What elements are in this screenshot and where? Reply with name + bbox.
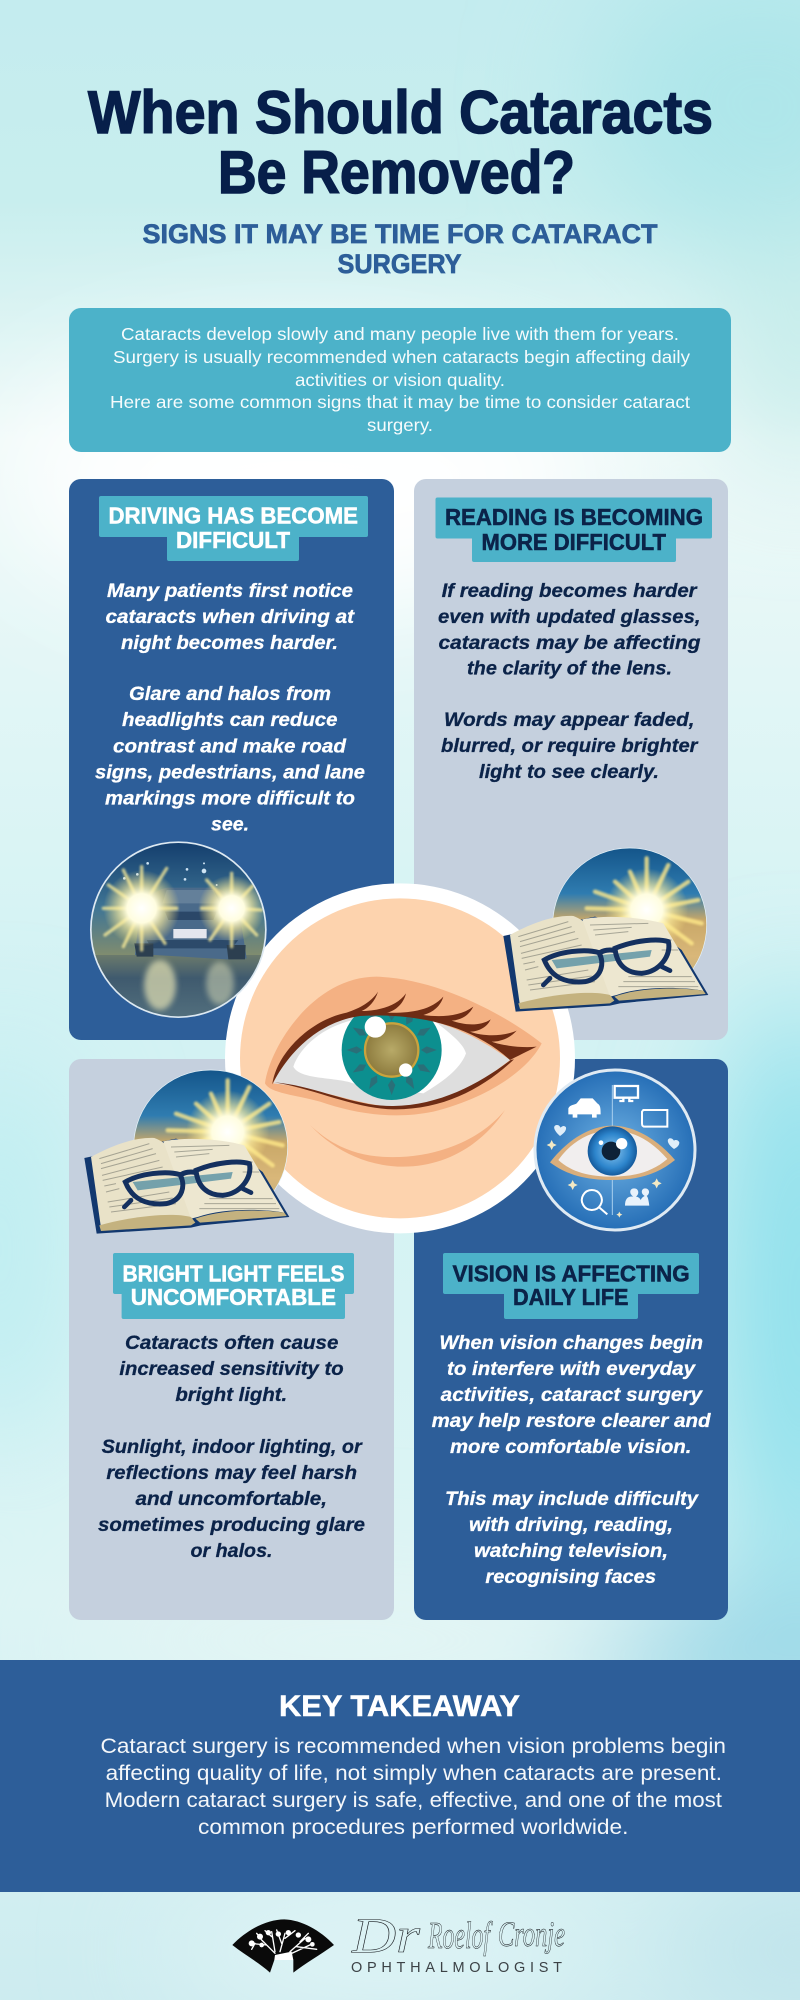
text: driving body: cataracts when driving at: [106, 606, 356, 628]
image: eye with daily life icons: [535, 1070, 695, 1230]
text: driving body: Many patients first notice: [107, 580, 353, 602]
eyelid: [265, 977, 542, 1115]
icon: people: [625, 1188, 649, 1206]
signature: Cronje: [498, 1914, 565, 1954]
text: reading body: blurred, or require brighter: [441, 735, 699, 757]
text: bright light body: Cataracts often cause: [125, 1332, 339, 1354]
text: bright light body: or halos.: [190, 1540, 272, 1562]
text: driving body: contrast and make road: [113, 736, 347, 758]
text: reading body: the clarity of the lens.: [467, 658, 672, 680]
text: key takeaway body: Modern cataract surgery is safe, effective, and one of the most: [105, 1789, 722, 1812]
signature: Roelof: [427, 1915, 493, 1957]
text: daily life body: with driving, reading,: [469, 1514, 673, 1536]
title: [88, 79, 713, 206]
subtitle: SIGNS IT MAY BE TIME FOR CATARACT: [142, 219, 658, 249]
main eye: [550, 1126, 675, 1180]
text: daily life body: When vision changes begin: [439, 1332, 703, 1354]
text: driving body: signs, pedestrians, and lane: [95, 762, 365, 784]
heading: daily life: DAILY LIFE: [513, 1284, 628, 1310]
text: bright light body: [98, 1332, 365, 1562]
text: daily life body: This may include difficulty: [445, 1488, 699, 1510]
panel: daily life: [414, 1059, 728, 1620]
panel: intro: Here are some common signs that it may be time to consider cataract: [110, 392, 690, 412]
iris: [342, 1016, 442, 1100]
image: car headlights: [85, 840, 272, 1022]
text: reading body: If reading becomes harder: [442, 580, 698, 602]
text: key takeaway body: common procedures performed worldwide.: [198, 1816, 628, 1839]
text: reading body: Words may appear faded,: [444, 709, 694, 731]
text: driving body: [95, 580, 365, 836]
image: book and sun, bright light panel: [84, 1069, 289, 1234]
heading: bright light: [113, 1253, 354, 1319]
signature: [351, 1907, 565, 1963]
band: key takeaway: [0, 1660, 800, 1892]
heading: reading: MORE DIFFICULT: [482, 529, 667, 555]
center eye illustration: [225, 883, 575, 1233]
heading: daily life: [443, 1253, 699, 1319]
eyeball: [273, 1013, 510, 1107]
heading: bright light: UNCOMFORTABLE: [131, 1284, 336, 1310]
panel: reading: [414, 479, 728, 1040]
heading: driving: [99, 496, 368, 561]
title: When Should Cataracts: [88, 79, 713, 146]
image: book and sun, reading panel: [503, 847, 708, 1012]
text: key takeaway body: Cataract surgery is recommended when vision problems begin: [100, 1735, 726, 1758]
text: bright light body: reflections may feel harsh: [106, 1462, 357, 1484]
text: daily life body: more comfortable vision.: [450, 1436, 691, 1458]
panel: intro: [69, 308, 731, 452]
text: bright light body: Sunlight, indoor lighting, or: [102, 1436, 363, 1458]
logo: [232, 1907, 565, 1976]
under-eye crease: [310, 1110, 505, 1167]
text: bright light body: increased sensitivity to: [119, 1358, 344, 1380]
text: driving body: headlights can reduce: [122, 709, 338, 731]
text: key takeaway body: [100, 1735, 726, 1839]
icon: monitor: [615, 1086, 638, 1101]
text: driving body: markings more difficult to: [105, 788, 355, 810]
wordmark: OPHTHALMOLOGIST: [351, 1960, 562, 1976]
icon: heart right: [668, 1138, 679, 1149]
panel: intro: Cataracts develop slowly and many people live with them for years.: [121, 324, 679, 344]
panel: intro: Surgery is usually recommended when cataracts begin affecting daily: [113, 347, 690, 367]
text: daily life body: to interfere with everyday: [447, 1358, 696, 1380]
panel: driving: [69, 479, 394, 1040]
icon: car: [568, 1098, 601, 1118]
text: daily life body: recognising faces: [485, 1566, 656, 1588]
text: driving body: Glare and halos from: [129, 683, 331, 705]
text: daily life body: may help restore clearer and: [432, 1410, 712, 1432]
text: daily life body: [432, 1332, 712, 1588]
panel: intro: surgery.: [367, 415, 433, 435]
heading: driving: DIFFICULT: [176, 527, 291, 553]
sparkles: [547, 1140, 662, 1218]
text: driving body: see.: [211, 814, 249, 836]
text: bright light body: bright light.: [175, 1384, 287, 1406]
eyeliner and lashes: [272, 992, 537, 1109]
subtitle: [142, 219, 658, 279]
text: bright light body: and uncomfortable,: [136, 1488, 327, 1510]
icon: magnifier: [582, 1190, 607, 1214]
text: bright light body: sometimes producing glare: [98, 1514, 365, 1536]
text: daily life body: watching television,: [474, 1540, 668, 1562]
heading: driving: DRIVING HAS BECOME: [108, 502, 358, 528]
text: reading body: light to see clearly.: [479, 761, 659, 783]
icon: heart left: [554, 1125, 566, 1136]
heading: daily life: VISION IS AFFECTING: [452, 1260, 690, 1286]
icon: television: [642, 1110, 667, 1127]
heading: key takeaway: KEY TAKEAWAY: [279, 1690, 520, 1723]
panel: bright light: [69, 1059, 394, 1620]
text: driving body: night becomes harder.: [121, 632, 338, 654]
title: Be Removed?: [218, 139, 575, 206]
signature: Dr: [351, 1907, 421, 1963]
heading: reading: [436, 498, 712, 562]
text: daily life body: activities, cataract surgery: [441, 1384, 703, 1406]
heading: bright light: BRIGHT LIGHT FEELS: [122, 1260, 344, 1286]
text: reading body: [438, 580, 701, 783]
icon: tree in eye: [232, 1919, 334, 1973]
subtitle: SURGERY: [338, 249, 462, 279]
text: reading body: cataracts may be affecting: [438, 632, 701, 654]
text: reading body: even with updated glasses,: [438, 606, 700, 628]
heading: reading: READING IS BECOMING: [445, 504, 703, 530]
text: key takeaway body: affecting quality of life, not simply when cataracts are present.: [106, 1762, 722, 1785]
panel: intro: activities or vision quality.: [295, 370, 505, 390]
